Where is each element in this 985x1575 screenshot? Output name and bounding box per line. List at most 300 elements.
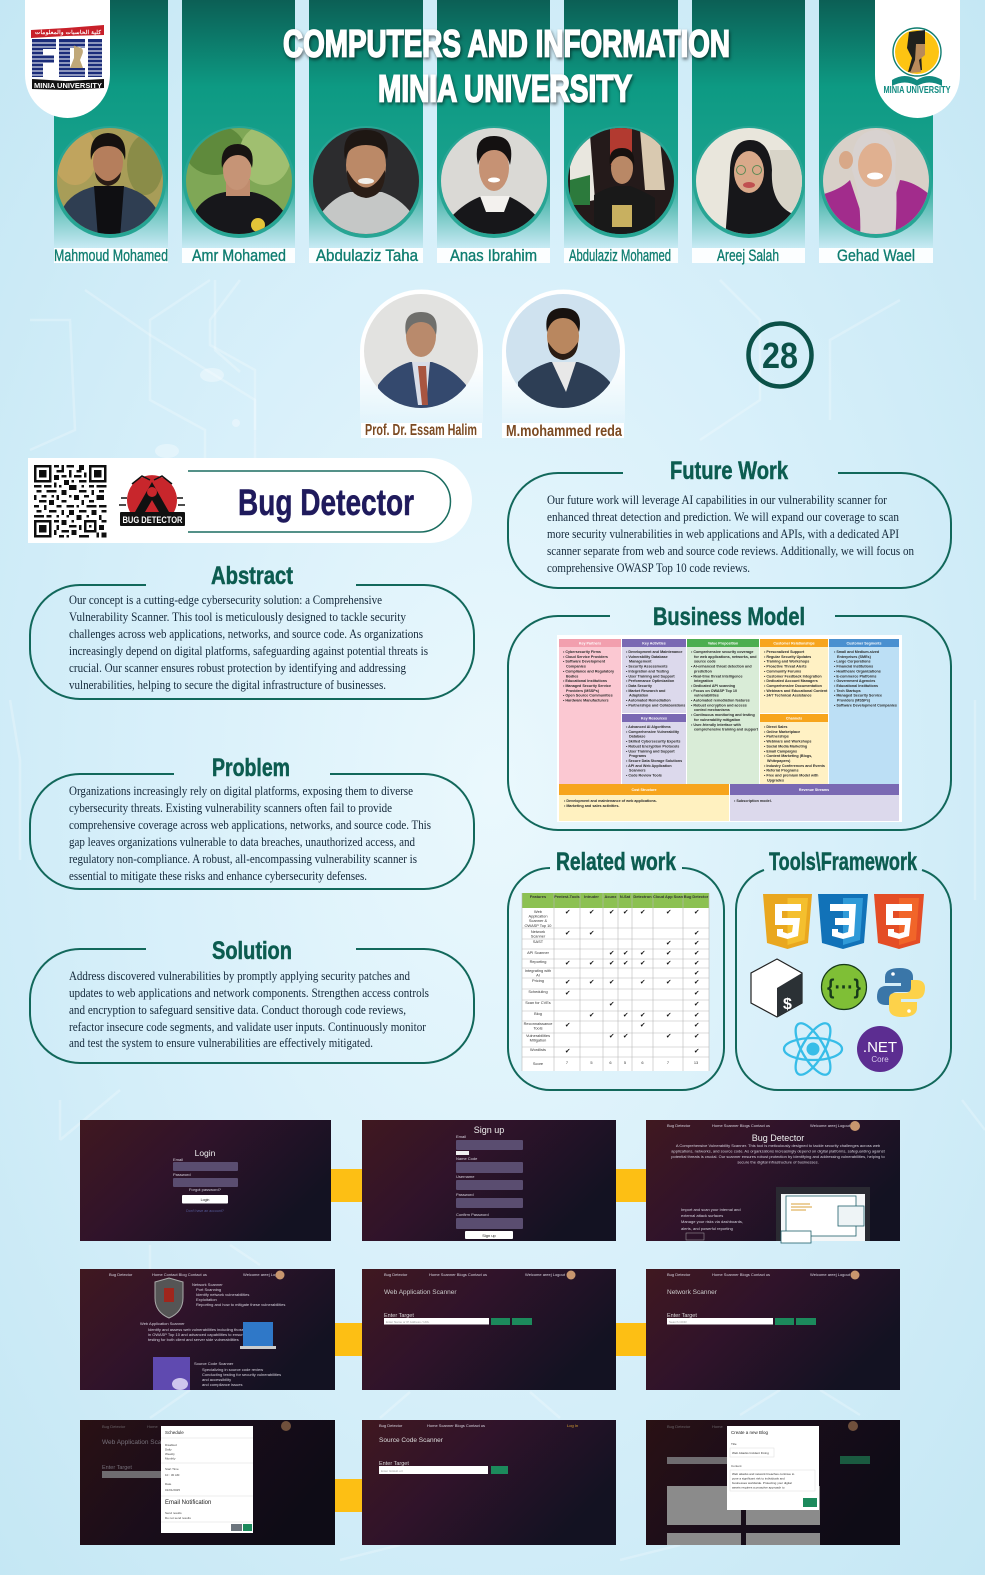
text: problem body: Organizations increasingly rely on digital platforms, exposing them to diverse [69, 784, 413, 798]
business model canvas: • Robust Encryption Protocols [626, 744, 679, 748]
screenshot: login: Email [173, 1157, 183, 1162]
business model canvas: • Customer Feedback Integration [764, 674, 822, 678]
business model canvas: • Data Security [626, 684, 653, 688]
screenshot: schedule dialog: Daily [165, 1448, 172, 1452]
photo: Gehad Wael [823, 128, 929, 234]
photo: Abdulaziz Taha [313, 128, 419, 234]
business model canvas: • Large Corporations [834, 660, 871, 664]
text: solution body: updates to web applications and network components. Strengthen access controls [69, 986, 429, 1000]
comparison table: ✔✔ [565, 989, 699, 997]
business model canvas: • Cloud Service Providers [563, 655, 608, 659]
comparison table: N-Sat [620, 894, 631, 899]
heading: problem: Problem [212, 754, 290, 782]
business model canvas: • Webinars and Workshops [764, 740, 811, 744]
screenshot: home page [646, 1120, 900, 1243]
screenshot: services page: and accessibility [202, 1377, 231, 1382]
business model canvas: • Free and premium Model with [764, 774, 819, 778]
business model canvas: Key Resources [641, 716, 667, 720]
business model canvas: • Marketing and sales activities. [564, 804, 619, 808]
comparison table: Blog [534, 1011, 542, 1016]
team names: Amr Mohamed [192, 247, 286, 265]
heading: abstract: Abstract [211, 562, 294, 590]
connectors between screenshots [331, 1169, 646, 1512]
business model canvas: • Financial Institutions [834, 665, 873, 669]
screenshot: network scanner: Welcome areej Logout [810, 1272, 851, 1277]
screenshot: sign up: Username [456, 1174, 475, 1179]
business model canvas: • Dedicated Account Managers [764, 679, 818, 683]
heading: business model: Business Model [653, 603, 805, 631]
comparison table: Bug Detector [684, 894, 709, 899]
screenshot: home page: Manage your risks via dashboards, [681, 1219, 743, 1224]
screenshot: sign up: Sign up [482, 1233, 497, 1238]
text: abstract body: vulnerabilities, helping to secure the digital infrastructure of businesses. [69, 678, 386, 692]
business model canvas: • Development and maintenance of web applications. [564, 799, 657, 803]
business model canvas: • Personalized Support [764, 650, 805, 654]
panel: business model [508, 603, 951, 830]
screenshot: services page: Identify and assess web vulnerabilities including those outlined [148, 1327, 259, 1332]
business model canvas: Adaptation [629, 694, 649, 698]
screenshot: network scanner: Network Scanner [667, 1289, 718, 1296]
title: MINIA UNIVERSITY [378, 68, 632, 110]
screenshot: home page: external attack surfaces [681, 1213, 723, 1218]
business model canvas: • Real-time threat intelligence [691, 674, 742, 678]
screenshot: home page: Welcome areej Logout [810, 1123, 851, 1128]
business model canvas: • Content Marketing (Blogs, [764, 754, 812, 758]
business model canvas: • Skilled Cybersecurity Experts [626, 740, 680, 744]
screenshot: sign up: Confirm Password [456, 1212, 489, 1217]
business model canvas [557, 635, 902, 822]
business model canvas: source code [694, 660, 716, 664]
text: abstract body [69, 593, 428, 692]
screenshot: services page: Reporting and how to mitigate these vulnerabilities [196, 1302, 285, 1307]
screenshot: schedule dialog: Monthly [165, 1456, 176, 1460]
screenshot: services page [80, 1269, 335, 1390]
business model canvas: • API and Web Application [626, 764, 672, 768]
screenshot: sign up: Name Code [456, 1156, 478, 1161]
screenshot: schedule dialog: 10 : 30 AM [165, 1473, 180, 1477]
business model canvas: for web applications, networks, and [694, 655, 757, 659]
screenshot: create blog dialog: Bug Detector [667, 1424, 691, 1429]
screenshot: services page: Network Scanner [192, 1282, 223, 1287]
project banner: Bug Detector [28, 458, 472, 543]
comparison table: Integrating with [525, 968, 551, 973]
screenshot: create blog dialog: Home [712, 1424, 723, 1429]
business model canvas: Companies [566, 665, 586, 669]
business model canvas: Database [629, 735, 645, 739]
screenshot: schedule dialog: Disabled [165, 1443, 177, 1447]
comparison table: ✔✔✔✔✔ [589, 1011, 699, 1019]
business model canvas: • Software Development [563, 660, 606, 664]
comparison table: ✔✔✔ [565, 1021, 699, 1029]
comparison table: Pricing [532, 978, 544, 983]
screenshot: web application scanner: Enter Target [384, 1313, 414, 1319]
comparison table: ✔✔ [666, 939, 699, 947]
supervisor: M.mohammed reda [502, 290, 625, 440]
screenshot: home page: Bug Detector [667, 1123, 691, 1128]
business model canvas: • Advanced AI Algorithms [626, 725, 671, 729]
comparison table: Application [528, 914, 548, 919]
business model canvas: • Focus on OWASP Top 10 [691, 689, 737, 693]
business model canvas: • Managed Security Service [563, 684, 611, 688]
screenshot: web application scanner [362, 1269, 616, 1390]
business model canvas: • Open Source Communities [563, 694, 613, 698]
business model canvas: • Webinars and Educational Content [764, 689, 828, 693]
screenshot: services page: Web Application Scanner [140, 1321, 185, 1326]
business model canvas: Providers (MSSPs) [837, 698, 871, 702]
comparison table: AI [536, 973, 540, 978]
business model canvas: • Code Review Tools [626, 774, 662, 778]
QR code [34, 465, 106, 538]
business model canvas: • Subscription model. [734, 799, 772, 803]
team names [54, 247, 933, 265]
text: abstract body: increasingly depend on digital platforms, safeguarding against potential threats is [69, 644, 428, 658]
business model canvas: Channels [786, 716, 802, 720]
title: COMPUTERS AND INFORMATION [283, 24, 730, 66]
poster number badge: 28 [762, 335, 798, 376]
business model canvas: • User Training and Support [626, 749, 675, 753]
screenshot: network scanner [646, 1269, 900, 1390]
comparison table: Mitigation [530, 1038, 546, 1043]
business model canvas: • Security Assessments [626, 665, 668, 669]
comparison table: 6 [609, 1060, 612, 1065]
team names: Gehad Wael [837, 247, 915, 265]
logo: FCI: كلية الحاسبات والمعلومات [35, 29, 101, 36]
business model canvas: Cost Structure [632, 788, 656, 792]
screenshot: home page: Bug Detector [752, 1133, 804, 1143]
screenshot: schedule dialog: 01/01/2025 [165, 1488, 180, 1492]
business model canvas: • Automated Remediation [626, 698, 671, 702]
comparison table: ✔ [694, 969, 699, 977]
comparison table: 13 [694, 1060, 698, 1065]
screenshot: home page: A Comprehensive Vulnerability Scanner. This tool is meticulously designed to tackle security challenges across web [676, 1143, 881, 1148]
comparison table: ✔✔✔ [565, 929, 699, 937]
business model canvas: integration [694, 679, 714, 683]
screenshot: schedule dialog: Web Application Scanner [102, 1439, 175, 1446]
icon: JavaScript shield [763, 894, 812, 949]
business model canvas: Whitepapers) [767, 759, 791, 763]
screenshot: web application scanner: Web Application Scanner [384, 1289, 457, 1296]
screenshot: sign up: Email [456, 1134, 466, 1139]
panel: future work [508, 457, 951, 588]
text: future work body: comprehensive OWASP Top 10 code reviews. [547, 561, 750, 575]
business model canvas: • Industry Conferences and Events [764, 764, 825, 768]
screenshot: web application scanner: Bug Detector [384, 1272, 408, 1277]
icon: .NET Core [857, 1026, 903, 1072]
business model canvas: • User-friendly interface with [691, 723, 742, 727]
screenshot: services page: Exploitation [196, 1297, 217, 1302]
text: problem body: gap leaves organizations vulnerable to data breaches, unauthorized access, and [69, 835, 415, 849]
text: abstract body: crucial. Our scanner ensures robust protection by identifying and addressing [69, 661, 406, 675]
heading: related work: Related work [556, 848, 676, 876]
text: future work body: more security vulnerabilities in web applications and APIs, with a dedicated API [547, 527, 899, 541]
screenshot: schedule dialog: Weekly [165, 1452, 175, 1456]
comparison table: ✔✔✔✔✔ [609, 949, 699, 957]
screenshot: create blog dialog: Create a new Blog [731, 1430, 769, 1435]
business model canvas: control mechanisms [694, 708, 730, 712]
comparison table: Scanner [531, 934, 546, 939]
screenshot: home page: Home Scanner Blogs Contact us [712, 1123, 770, 1128]
screenshot: web application scanner: Enter Name or IP Address / URL [386, 1320, 430, 1324]
business model canvas: • AI-enhanced threat detection and [691, 665, 752, 669]
business model canvas: • Secure Data Storage Solutions [626, 759, 682, 763]
business model canvas: prediction [694, 669, 713, 673]
header: gradient columns [54, 0, 933, 248]
screenshot: source code scanner [362, 1420, 616, 1545]
business model canvas: • Comprehensive security coverage [691, 650, 753, 654]
comparison table: 7 [667, 1060, 669, 1065]
team names: Mahmoud Mohamed [54, 247, 168, 265]
business model canvas: Providers (MSSPs) [566, 689, 600, 693]
comparison table: Network [531, 929, 545, 934]
business model canvas: • Tech Startups [834, 689, 861, 693]
text: solution body: Address discovered vulnerabilities by promptly applying security patches and [69, 969, 410, 983]
screenshot: home page: alerts, and powerful reporting [681, 1226, 733, 1231]
screenshot: source code scanner: Log In [567, 1423, 578, 1428]
supervisor: M.mohammed reda: M.mohammed reda [506, 423, 622, 440]
comparison table: Scanner & [529, 918, 547, 923]
business model canvas: • Small and Medium-sized [834, 650, 880, 654]
business model canvas: • Development and Maintenance [626, 650, 682, 654]
screenshot: source code scanner: Source Code Scanner [379, 1437, 444, 1444]
logo: FCI: MINIA UNIVERSITY [34, 83, 102, 90]
business model canvas: • Direct Sales [764, 725, 787, 729]
photo: Mahmoud Mohamed [57, 128, 163, 234]
panel: problem [30, 754, 474, 889]
screenshot: login: Password [173, 1172, 191, 1177]
text: future work body: scanner separate from web and source code reviews. Additionally, we will focus on [547, 544, 914, 558]
screenshot: create blog dialog: pose a significant risk to individuals and [732, 1476, 785, 1480]
business model canvas: Key Partners [579, 642, 601, 646]
panel: abstract [30, 562, 474, 699]
screenshot: create blog dialog: assets requires a proactive approach to [732, 1486, 785, 1490]
business model canvas: • Continuous monitoring and testing [691, 713, 755, 717]
business model canvas: • Integration and Testing [626, 669, 669, 673]
comparison table: ✔✔ [565, 1047, 699, 1055]
business model canvas: • Dedicated API scanning [691, 684, 735, 688]
comparison table: ✔✔✔✔✔✔✔ [565, 908, 699, 916]
icon: HTML5 shield [874, 894, 924, 949]
business model canvas: comprehensive training and support [694, 728, 759, 732]
business model canvas: Bodies [566, 674, 578, 678]
business model canvas: vulnerabilities [694, 694, 719, 698]
business model canvas: • 24/7 Technical Assistance [764, 694, 812, 698]
heading: solution: Solution [212, 937, 292, 965]
screenshot: schedule dialog: Home [147, 1424, 158, 1429]
business model canvas: Scanners [629, 769, 646, 773]
supervisor: Prof. Dr. Essam Halim: Prof. Dr. Essam Halim [365, 422, 477, 439]
business model canvas: • Regular Security Updates [764, 655, 811, 659]
team names: Abdulaziz Taha [316, 247, 419, 265]
screenshot: schedule dialog: Start Time [165, 1467, 179, 1471]
screenshot: services page: Identify network vulnerabilities [196, 1292, 249, 1297]
screenshot: create blog dialog: Title [731, 1442, 737, 1446]
icon: .NET Core: .NET [863, 1039, 897, 1056]
text: future work body: Our future work will leverage AI capabilities in our vulnerability scanner for [547, 493, 887, 507]
panel: solution [30, 937, 474, 1063]
screenshot: network scanner: Home Scanner Blogs Contact us [712, 1272, 770, 1277]
business model canvas: • Healthcare Organizations [834, 669, 881, 673]
comparison table: Intruder [584, 894, 599, 899]
icon: python [877, 968, 925, 1017]
photo: Abdulaziz Mohamed [568, 128, 674, 234]
project name: Bug Detector [238, 482, 414, 523]
business model canvas: • Partnerships and Collaborations [626, 703, 685, 707]
screenshot: create blog dialog: Web attacks and network breaches continue to [732, 1472, 795, 1476]
screenshot: schedule dialog: Bug Detector [102, 1424, 126, 1429]
text: solution body: and encryption to safeguard sensitive data. Conduct thorough code reviews, [69, 1003, 406, 1017]
text: future work body: enhanced threat detection and prediction. We will expand our coverage to scan [547, 510, 899, 524]
screenshot: web application scanner: Home Scanner Blogs Contact us [429, 1272, 487, 1277]
supervisor: Prof. Dr. Essam Halim [360, 290, 483, 439]
comparison table: 7 [566, 1060, 568, 1065]
business model canvas: Customer Segments [847, 642, 881, 646]
team names: Abdulaziz Mohamed [569, 247, 671, 265]
business model canvas: • Partnerships [764, 735, 789, 739]
comparison table: Cloud App Scan [653, 894, 684, 899]
text: problem body: comprehensive coverage across web applications, networks, and source code. This [69, 818, 431, 832]
logo: FCI [25, 0, 110, 118]
text: solution body: refactor insecure code segments, and validate user inputs. Continuously monitor [69, 1020, 426, 1034]
screenshot: login: Forgot password? [189, 1187, 222, 1192]
business model canvas: • Performance Optimization [626, 679, 675, 683]
poster number badge [748, 324, 812, 386]
screenshot: services page: Port Scanning [196, 1287, 221, 1292]
business model canvas: • Email Campaigns [764, 749, 797, 753]
screenshot: schedule dialog: Email Notification [165, 1500, 211, 1506]
text: problem body: cybersecurity threats. Existing vulnerability scanners often fail to provide [69, 801, 392, 815]
business model canvas: Upgrades [767, 778, 784, 782]
title [283, 24, 730, 110]
team photos [53, 125, 932, 240]
screenshot: create blog dialog: Web Attacks Incident Fixing [732, 1451, 769, 1455]
comparison table: ✔✔✔✔✔✔✔ [565, 959, 699, 967]
icon: react [784, 1018, 842, 1080]
screenshot: services page: Conducting testing for security vulnerabilities [202, 1372, 281, 1377]
comparison table: OWASP Top 10 [525, 923, 552, 928]
screenshot: services page: Specializing in source code review [202, 1367, 263, 1372]
business model canvas: Key Activities [642, 642, 666, 646]
logo: Minia University: MINIA UNIVERSITY [884, 85, 951, 96]
screenshot: services page: Bug Detector [109, 1272, 133, 1277]
screenshot: home page: potential threats is crucial. Our scanner ensures robust protection by identifying and addressing vulnerabilities, helping to [671, 1154, 886, 1159]
business model canvas: • Market Research and [626, 689, 666, 693]
business model canvas: • Referral Programs [764, 769, 798, 773]
screenshot: schedule dialog: Send results [165, 1511, 182, 1515]
comparison table: ✔✔✔✔✔✔ [565, 978, 699, 986]
comparison table: Tools [533, 1026, 543, 1031]
icon: .NET Core: Core [871, 1055, 889, 1064]
comparison table: Reporting [530, 959, 546, 964]
screenshot: create blog dialog [646, 1420, 900, 1545]
screenshot: home page: secure the digital infrastructure of businesses. [737, 1160, 819, 1164]
screenshot: services page: Home Contact Blog Contact us [152, 1272, 207, 1277]
business model canvas: Value Proposition [708, 642, 738, 646]
business model canvas: • User Training and Support [626, 674, 675, 678]
business model canvas: Programs [629, 754, 646, 758]
comparison table: Pentest-Tools [554, 894, 580, 899]
business model canvas: • Robust encryption and access [691, 703, 747, 707]
icon: swagger: {···} [827, 976, 861, 999]
business model canvas: Revenue Streams [799, 788, 829, 792]
business model canvas: • Managed Security Service [834, 694, 882, 698]
screenshot: home page: Import and scan your internal and [681, 1207, 741, 1212]
screenshot: home page: applications, networks, and source code. As organizations increasingly depend on digital platforms, safeguarding against [671, 1148, 886, 1154]
business model canvas: • Government Agencies [834, 679, 875, 683]
business model canvas: Management [629, 660, 652, 664]
screenshot: source code scanner: Bug Detector [379, 1423, 403, 1428]
icon: bash: $ [783, 996, 792, 1013]
comparison table: ✔✔✔✔ [609, 1032, 699, 1040]
heading: tools and frameworks: Tools\Framework [769, 848, 917, 876]
business model canvas: • Proactive Threat Alerts [764, 665, 807, 669]
screenshot: schedule dialog: Enter Target [102, 1465, 132, 1471]
screenshot: network scanner: Bug Detector [667, 1272, 691, 1277]
text: future work body [547, 493, 914, 575]
screenshot: source code scanner: Home Scanner Blogs Contact us [427, 1423, 485, 1428]
comparison table: 5 [590, 1060, 593, 1065]
comparison table: SAST [533, 939, 544, 944]
business model canvas: Customer Relationships [773, 642, 815, 646]
business model canvas: • Community Forums [764, 669, 801, 673]
business model canvas: • Comprehensive Vulnerability [626, 730, 680, 734]
icon: swagger [822, 964, 866, 1010]
text: abstract body: Our concept is a cutting-edge cybersecurity solution: a Comprehensive [69, 593, 382, 607]
team names: Anas Ibrahim [450, 247, 537, 265]
text: problem body: regulatory non-compliance. A robust, all-encompassing vulnerability scanner is [69, 852, 417, 866]
screenshot: create blog dialog: businesses worldwide. Protecting your digital [732, 1481, 792, 1485]
business model canvas: • Educational Institutions [834, 684, 878, 688]
comparison table [522, 893, 709, 1071]
comparison table: ✔✔ [609, 1000, 699, 1008]
screenshot: services page: and compliance issues [202, 1382, 242, 1387]
icon: CSS3 shield [818, 894, 868, 949]
business model canvas: • Cybersecurity Firms [563, 650, 601, 654]
bug detector logo: BUG DETECTOR [122, 515, 183, 526]
business model canvas: • Comprehensive Documentation [764, 684, 823, 688]
comparison table: Features [530, 894, 546, 899]
comparison table: Wordlists [530, 1047, 546, 1052]
text: problem body: essential to mitigate these risks and enhance cybersecurity defenses. [69, 869, 367, 883]
text: solution body [69, 969, 429, 1050]
business model canvas: for vulnerability mitigation [694, 718, 741, 722]
heading: future work: Future Work [670, 457, 788, 485]
screenshot: network scanner: Search CIDR [669, 1320, 688, 1324]
screenshot: services page: testing for both client and server side vulnerabilities [148, 1337, 239, 1342]
business model canvas: • Online Marketplace [764, 730, 800, 734]
comparison table: Web [534, 909, 542, 914]
comparison table: Vulnerabilities [526, 1033, 550, 1038]
text: problem body [69, 784, 431, 883]
photo: Amr Mohamed [186, 128, 292, 234]
screenshot: login [80, 1120, 331, 1241]
comparison table: Scheduling [528, 989, 548, 994]
business model canvas: • Hardware Manufacturers [563, 698, 609, 702]
screenshot: schedule dialog: Do not send results [165, 1516, 191, 1520]
business model canvas: • Social Media Marketing [764, 744, 807, 748]
business model canvas: Enterprises (SMEs) [837, 655, 872, 659]
panel: tools and frameworks [736, 848, 951, 1090]
business model canvas: • Compliance and Regulatory [563, 669, 615, 673]
text: abstract body: challenges across web applications, networks, and source code. As organizations [69, 627, 423, 641]
screenshot: schedule dialog: Schedule [165, 1430, 184, 1435]
business model canvas: • Vulnerability Database [626, 655, 668, 659]
screenshot: login: Login [201, 1198, 209, 1202]
icon: bash [751, 959, 802, 1017]
screenshot: services page: in OWASP Top 10 and advanced capabilities to ensure a thorough [148, 1332, 265, 1337]
comparison table: Acunx [605, 894, 617, 899]
business model canvas: • Automated remediation features [691, 698, 750, 702]
business model canvas: • Training and Workshops [764, 660, 809, 664]
